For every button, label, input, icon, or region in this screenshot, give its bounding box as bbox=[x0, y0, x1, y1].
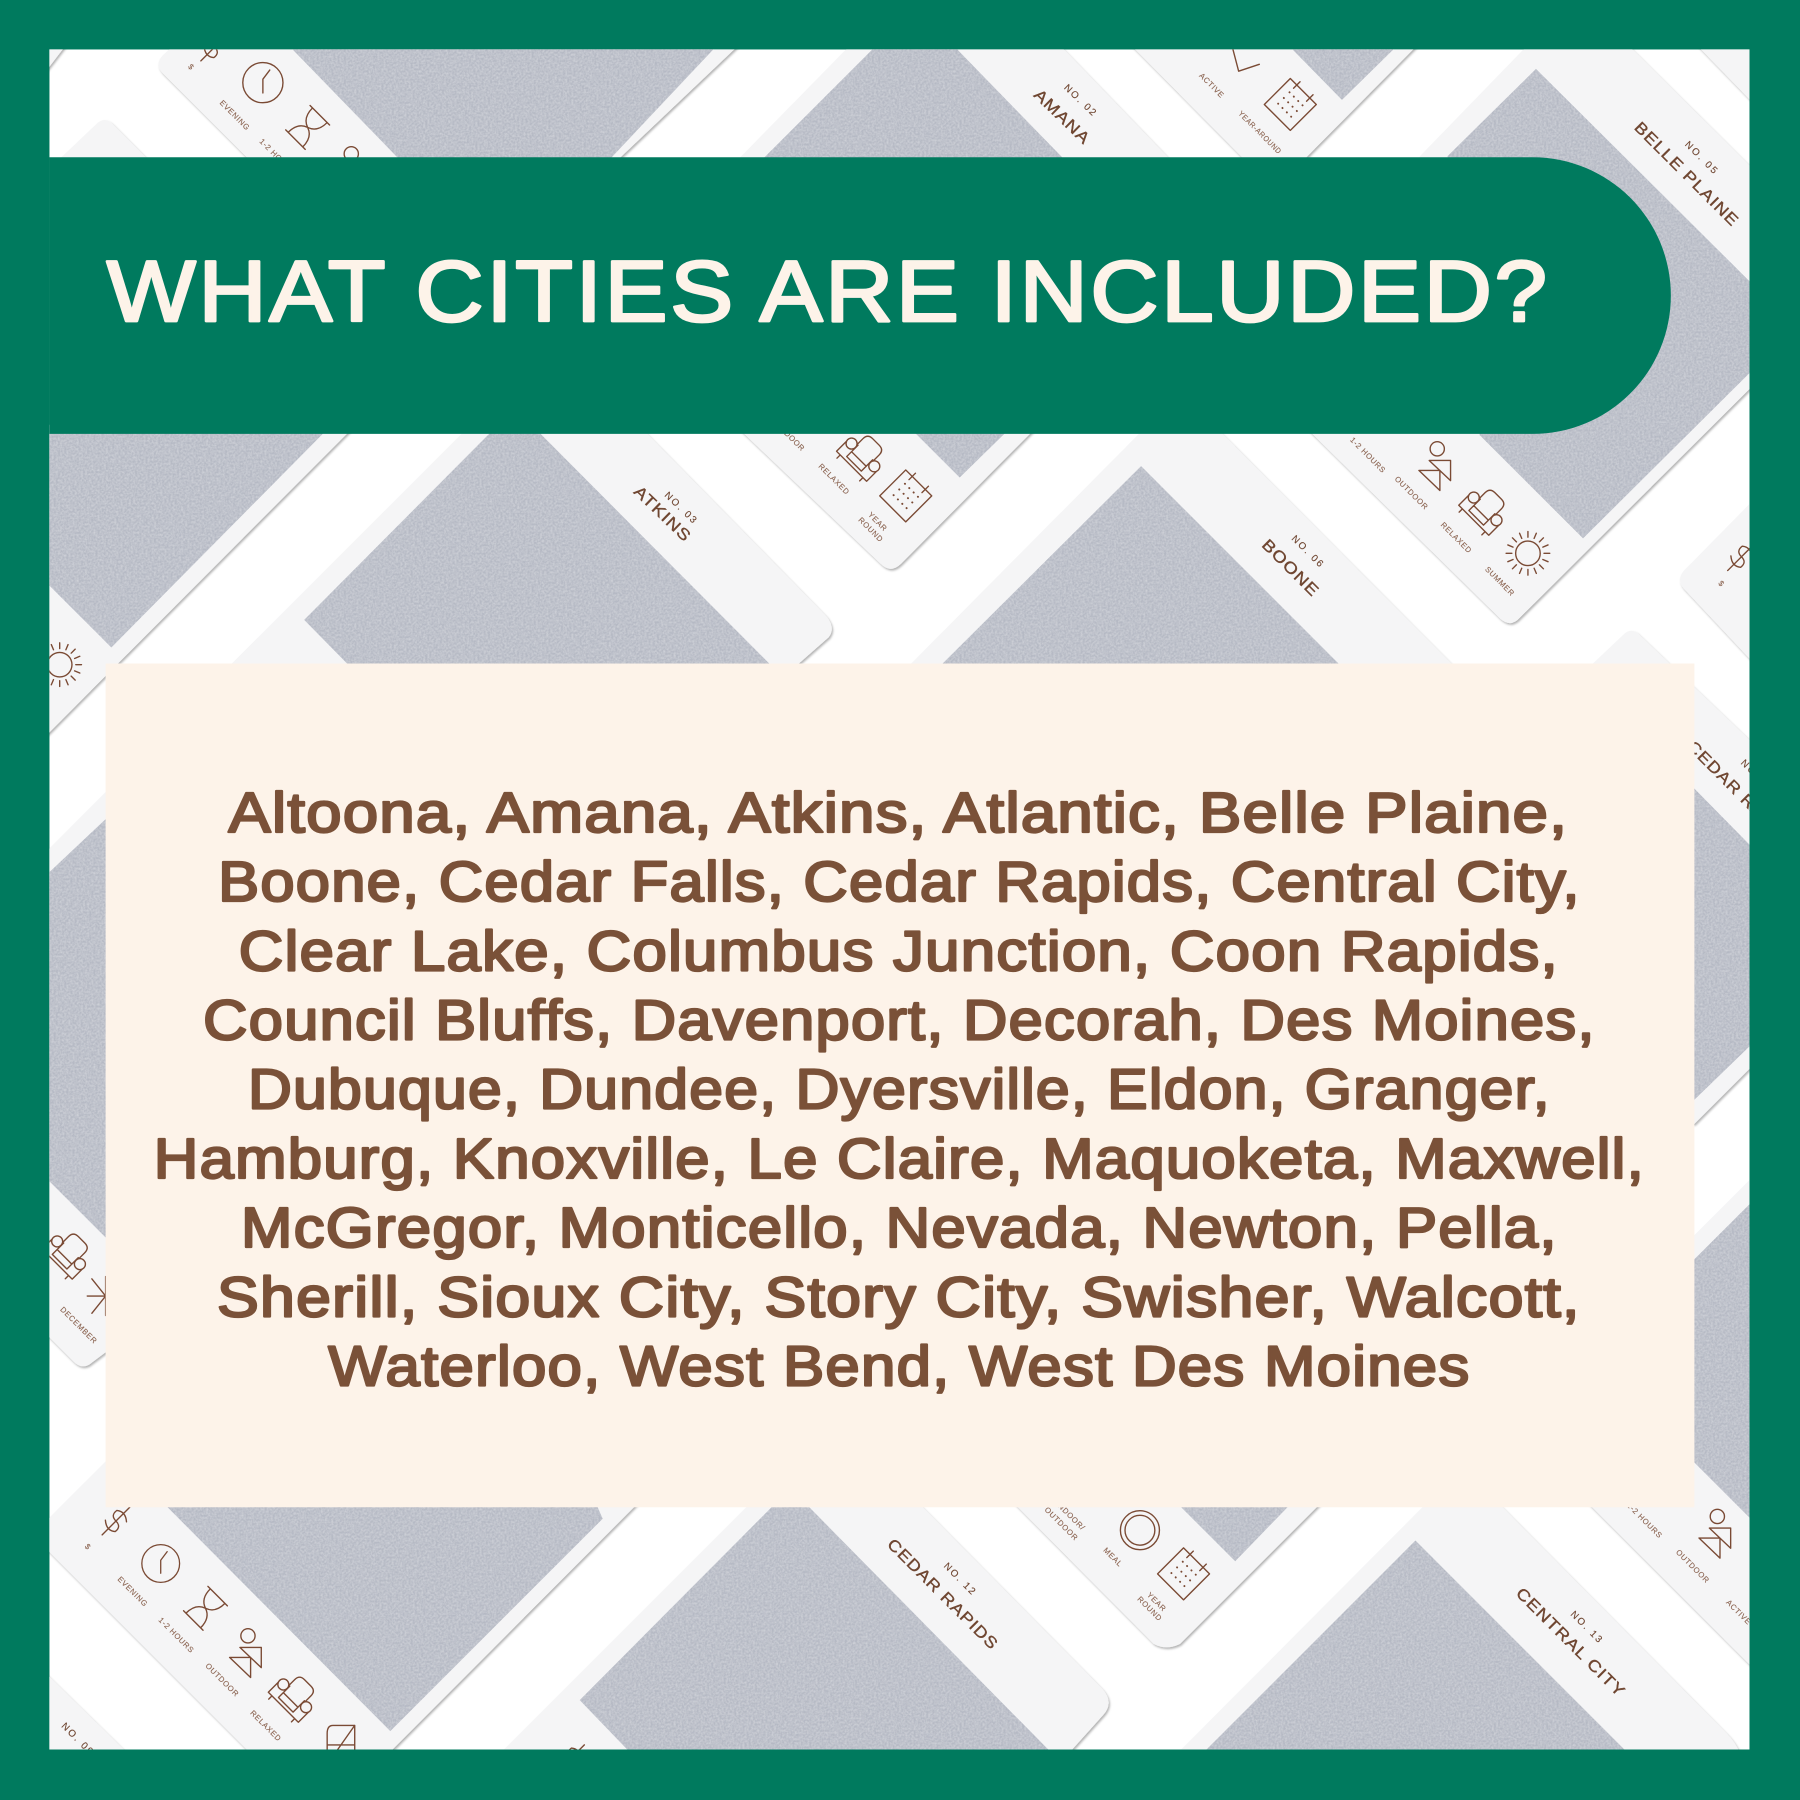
card number: NO. 12 bbox=[941, 1561, 977, 1597]
label: duration: 1-2 HOURS bbox=[258, 137, 297, 176]
icon: dollar bbox=[96, 1502, 135, 1541]
label: duration: 1-2 HOURS bbox=[1348, 435, 1388, 475]
card number: NO. 02 bbox=[1061, 82, 1098, 118]
icon: sun bbox=[49, 642, 82, 688]
icon: hourglass bbox=[184, 1586, 227, 1630]
label: evening: EVENING bbox=[116, 1575, 150, 1609]
title: WHAT CITIES ARE INCLUDED? bbox=[107, 244, 1550, 340]
label: active: ACTIVE bbox=[1724, 1598, 1753, 1627]
icon: clock bbox=[142, 1545, 180, 1582]
icon: figure bbox=[344, 146, 360, 158]
icon: figure bbox=[230, 1629, 261, 1678]
label: year: YEAR bbox=[1145, 1590, 1168, 1613]
card number: NO. 09 bbox=[59, 1721, 95, 1757]
icon: calendar bbox=[1264, 75, 1320, 130]
label: evening: EVENING bbox=[218, 98, 252, 132]
card number: NO. 11 bbox=[1738, 758, 1774, 794]
card name: CEDAR RAPIDS bbox=[883, 1535, 1002, 1654]
label: december: DECEMBER bbox=[58, 1305, 99, 1346]
icon: leaf bbox=[327, 1725, 355, 1763]
label: outdoor: OUTDOOR bbox=[769, 416, 807, 453]
label: duration: 1-2 HOURS bbox=[1625, 1501, 1664, 1540]
card name: AMANA bbox=[1030, 86, 1094, 148]
card corner: top right bbox=[1699, 49, 1750, 102]
icon: dollar bbox=[1722, 537, 1761, 576]
label: relaxed: RELAXED bbox=[248, 1708, 283, 1743]
card name: CEDAR RAPIDS bbox=[1684, 737, 1800, 856]
icon: figure bbox=[1419, 442, 1451, 491]
icon: plate bbox=[1120, 1511, 1159, 1550]
icon: armchair bbox=[39, 1225, 97, 1283]
text block: cities: McGregor, Monticello, Nevada, Newton, Pella, bbox=[241, 1196, 1558, 1259]
icon: calendar bbox=[880, 467, 935, 522]
card: meal year round bbox=[999, 1488, 1336, 1647]
text block: cities: Altoona, Amana, Atkins, Atlantic, Belle Plaine, bbox=[228, 781, 1568, 844]
icon: dollar bbox=[551, 1739, 590, 1778]
card: Central City bbox=[1174, 1483, 1740, 1756]
text block: cities bbox=[154, 781, 1645, 1398]
text block: cities: Clear Lake, Columbus Junction, Coon Rapids, bbox=[239, 919, 1559, 982]
icon: clock bbox=[243, 63, 283, 103]
label: relaxed: RELAXED bbox=[817, 462, 851, 497]
label: year: YEAR bbox=[866, 510, 889, 533]
text block: cities: Sherill, Sioux City, Story City, Swisher, Walcott, bbox=[217, 1265, 1581, 1328]
text block: cities: Council Bluffs, Davenport, Decorah, Des Moines, bbox=[203, 988, 1596, 1051]
card: Atkins bbox=[232, 434, 834, 664]
icon: dollar bbox=[268, 659, 306, 698]
card: Cedar Rapids bbox=[492, 1483, 1109, 1778]
card corner: top left bbox=[49, 49, 66, 72]
card: right edge lower bbox=[1538, 1162, 1791, 1706]
label: round: ROUND bbox=[857, 515, 885, 544]
label: outdoor: OUTDOOR bbox=[1393, 474, 1430, 512]
icon: calendar bbox=[1158, 1545, 1213, 1600]
label: round: ROUND bbox=[1135, 1595, 1164, 1623]
label: active: ACTIVE bbox=[1197, 71, 1226, 100]
label: summer: SUMMER bbox=[1483, 565, 1516, 598]
label: duration: 1-2 HOURS bbox=[157, 1616, 196, 1655]
card: Cedar Falls / Rapids right edge bbox=[1578, 631, 1800, 1124]
card tip: top left bbox=[62, 120, 146, 158]
card number: NO. 06 bbox=[1289, 533, 1325, 570]
text block: cities: Hamburg, Knoxville, Le Claire, Maquoketa, Maxwell, bbox=[154, 1127, 1645, 1190]
icon: hourglass bbox=[286, 106, 330, 149]
icon: armchair bbox=[833, 427, 891, 485]
label: price: $ bbox=[83, 1542, 93, 1552]
label: price: $ bbox=[1716, 579, 1726, 589]
card name: CENTRAL CITY bbox=[1512, 1584, 1629, 1701]
card: right edge with dollar icon bbox=[1680, 497, 1761, 666]
card: evening activity bbox=[158, 49, 739, 158]
icon: snowflake bbox=[87, 1277, 106, 1316]
label: outdoor: OUTDOOR bbox=[1674, 1548, 1711, 1585]
card corner: bottom left bbox=[34, 1662, 138, 1763]
card: Amana bbox=[741, 49, 1169, 158]
label: year-around: YEAR-AROUND bbox=[1236, 109, 1283, 156]
label: price: $ bbox=[186, 62, 196, 72]
card: Belle Plaine bbox=[1310, 49, 1750, 626]
label: meal: MEAL bbox=[1102, 1546, 1125, 1569]
text block: cities: Dubuque, Dundee, Dyersville, Eldon, Granger, bbox=[248, 1058, 1551, 1121]
text block: cities: Waterloo, West Bend, West Des Moines bbox=[328, 1335, 1471, 1398]
icon: figure fragment bbox=[1233, 49, 1259, 71]
card: Boone bbox=[882, 425, 1481, 693]
card: bottom left evening bbox=[34, 1452, 689, 1763]
card number: NO. 13 bbox=[1568, 1609, 1604, 1645]
label: outdoor: OUTDOOR bbox=[204, 1661, 241, 1699]
card: relaxed year round bbox=[735, 416, 1039, 569]
card: active year-around bbox=[1134, 49, 1418, 158]
card name: ATKINS bbox=[630, 483, 695, 546]
panel: city list bbox=[106, 664, 1694, 1507]
card name: BELLE PLAINE bbox=[1631, 119, 1742, 230]
text block: cities: Boone, Cedar Falls, Cedar Rapids, Central City, bbox=[218, 850, 1581, 913]
card number: NO. 05 bbox=[1682, 139, 1720, 177]
icon: armchair bbox=[1458, 490, 1504, 536]
title banner bbox=[49, 157, 1671, 434]
label: indoor: INDOOR/ bbox=[1054, 1499, 1087, 1532]
icon: sun bbox=[1506, 532, 1550, 575]
label: outdoor: OUTDOOR bbox=[1043, 1505, 1080, 1543]
label: relaxed: RELAXED bbox=[1439, 520, 1474, 555]
card name: BOONE bbox=[1258, 536, 1323, 600]
card: left edge with sun bbox=[34, 425, 356, 747]
icon: armchair bbox=[265, 1668, 323, 1726]
icon: dollar bbox=[200, 49, 218, 62]
card number: NO. 03 bbox=[662, 490, 698, 526]
icon: figure bbox=[1699, 1509, 1731, 1558]
card: left edge December bbox=[34, 783, 115, 1366]
